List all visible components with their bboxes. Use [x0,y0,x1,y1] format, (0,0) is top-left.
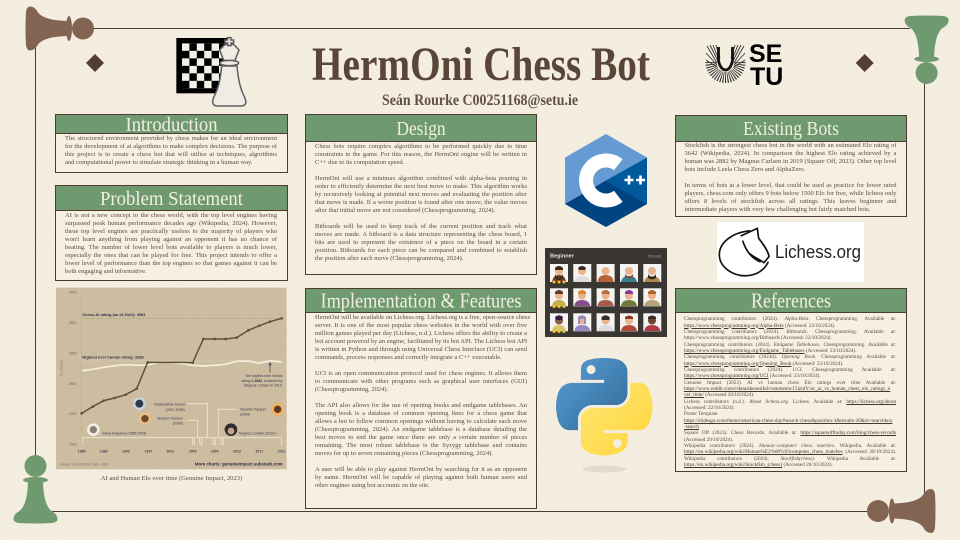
text: introduction body: this project is to create a chess bot that will utilise ai techniques, algorithms [65,151,277,158]
text: reference list: Chessprogramming contributors (2024d). Opening Book. Chessprogramming Available at: [684,354,896,360]
text: design body: constraints in the game. For this reason, the HermOni engine will be written in [315,151,527,158]
text: implementation body: bot account powered by an engine, facilitated by its bot API. The Lichess bot API [315,338,527,345]
chart: AI and human Elo over time: Source: Our World in Data, FIDE [60,463,109,467]
heading: introduction [56,115,287,134]
text: implementation body: (Chessprogramming, 2024). An endgame tablebase is a database detailing the [315,426,527,433]
text: reference list: Square Off (2023). Chess Records. Available at: https://squareofftoday.com/blog/chess-records [684,430,896,436]
text: reference list: https://www.chessprogramming.org/Opening_Book (Accessed: 23/10/2024). [684,361,843,367]
text: design body: position. Bitboards for each piece can be compared and combined to establish [315,247,527,254]
text: implementation body: UCI is an open communication protocol used for chess engines. It allows them [315,370,527,377]
icon: SETU logo: TU [750,63,783,91]
chart: AI and human Elo over time: 2021 [278,450,286,454]
heading: references [676,289,906,313]
text: problem statement body: especially the ones that can be played for free. This project intends to offer a [65,252,277,259]
text: reference list: https://www.chessprogramming.org/Bitboards (Accessed: 22/10/2024). [684,335,832,341]
text: reference list: https://www.chessprogramming.org/Endgame_Tablebases (Accessed: 23/10/2024). [684,348,857,354]
text: existing bots body: offers 8 levels of stockfish across all ratings. This leaves beginner and [684,198,896,205]
chart: AI and human Elo over time: 2001 [166,450,174,454]
icon: diamond left [86,54,104,72]
text: reference list: Wikipedia contributors (2024). Stockfish(chess). Wikipedia Available at: [684,456,896,462]
text: implementation body: is written in Python and through using Universal Chess Interface (UCI) can send [315,346,527,353]
text: introduction body [65,135,277,166]
icon: C++ logo [565,134,647,227]
text: existing bots body: Stockfish is the strongest chess bot in the world with an estimated Elo rating of [684,142,896,149]
text: implementation body: allows a bot to follow common openings without having to calculate each move [315,418,527,425]
text: design body: Bitboards will be used to keep track of the current position and track what [315,223,527,230]
heading: existing bots [676,116,906,142]
chart: AI and human Elo over time: 1989 [100,450,108,454]
text: reference list: (Accessed 20/10/2024). [684,437,733,443]
text: reference list: Wikipedia contributors (2024). Human–computer chess matches. Wikipedia. Available at: [684,443,896,449]
icon: SETU logo [706,40,783,91]
beginner bots screenshot [545,248,667,337]
text: design body [315,143,527,262]
chart: AI and human Elo over time: 1997 [144,450,152,454]
author line: Seán Rourke C00251168@setu.ie [382,92,578,109]
icon: SETU logo: SE [749,40,782,68]
chart: AI and human Elo over time: Chess AI rating (as of 2021): 3581 [82,312,147,317]
icon: brown pawn top left [26,6,94,50]
icon: green pawn top right [905,16,949,84]
text: implementation body: remaining. The most robust tablebase is the Syzygy tablebase and contains [315,442,527,449]
chart: AI and human Elo over time: Highest ever human rating: 2882 [82,354,145,359]
text: problem statement body: beating. The number of lower level bots available to players is much lower, [65,244,277,251]
text: implementation body: commands, process responses and correctly integrate a C++ executable. [315,354,502,361]
text: existing bots body: bots include Leela Chess Zero and AlphaZero. [684,166,805,173]
text: implementation body: moves for up to seven remaining pieces (Chessprogramming, 2024). [315,450,493,457]
text: reference list: Chessprogramming contributors (2024). Alpha-Beta. Chessprogramming. Available at: [684,316,896,322]
chart: AI and human Elo over time: 4000 [69,291,77,295]
text: problem statement body: lower level of performance than the top engines so that games against it can be [65,260,277,267]
chart: AI and human Elo over time: 2009 [211,450,219,454]
text: problem statement body [65,212,277,275]
chart: AI and human Elo over time: Magnus Carlsen (2010-) [239,431,277,435]
text: reference list: https://en.wikipedia.org/wiki/Stockfish_(chess) (Accessed 20/10/2024). [684,462,833,468]
heading: problem statement [56,186,287,211]
heading: design: Design [396,118,446,140]
chart: AI and human Elo over time [56,288,287,469]
text: design body: order to efficiently determine the next best move to make. This algorithm works [315,183,527,190]
icon: Python logo shadow [582,466,626,472]
beginner bots screenshot: 15 bots [648,254,661,258]
panel: design [305,114,537,275]
text: implementation body: The API also allows for the use of opening books and endgame tablebases. An [315,402,527,409]
text: design body: by recursively looking at potential next moves and evaluating the position after [315,191,527,198]
text: problem statement body: both engaging and informative. [65,268,147,275]
chart: AI and human Elo over time: (2009) [240,413,250,417]
icon: chess board and king logo [176,38,246,106]
chart: AI and human Elo over time: (2006) [173,422,183,426]
text: design body: Chess bots require complex algorithms to be performed quickly due to time [315,143,527,150]
chart: AI and human Elo over time: Elo Rating [59,360,63,376]
text: reference list: https://www.reddit.com/r/dataisbeautiful/comments/15lznlY/oc_ai_vs_human_chess_elo_ratings_o [684,386,890,392]
chart caption: AI and Human Elo over time (Genuine Impact, 2023) [101,475,242,482]
text: reference list: https://www.chessprogramming.org/UCI (Accessed: 23/10/2024). [684,373,821,379]
text: reference list: -search [684,424,699,430]
icon: Python logo [556,358,652,456]
chart: AI and human Elo over time: Vesselin Topalov [157,417,183,421]
text: implementation body: best moves to end the game once there are only a certain number of pieces [315,434,527,441]
text: problem statement body: these top level engines are practically useless to the majority of players who [65,228,277,235]
text: implementation body: opening book is a database of common opening lines for a chess game that [315,410,527,417]
text: existing bots body: In terms of bots at a lower level, that could be used as practice for lower rated [684,182,896,189]
chart: AI and human Elo over time: (2007-2008) [166,408,185,412]
chart: AI and human Elo over time: 3500 [69,321,77,325]
text: reference list: Chessprogramming contributors (2024). Endgame Tablebases. Chessprogramming. Available at: [684,342,896,348]
text: reference list: Lichess contributors (n.d.). About lichess.org. Lichess. Available at: https://lichess.org/about [684,399,896,405]
text: design body: that move is made. If a worse position is found after one move, the value moves [315,199,527,206]
text: reference list: Chessprogramming contributors (2024). Bitboards. Chessprogramming. Available at: [684,329,896,335]
text: implementation body: A user will be able to play against HermOni by searching for it as an opponent [315,466,527,473]
chart: AI and human Elo over time: More charts: genuineimpact.substack.com [195,461,283,466]
text: implementation body: HermOni will be available on Lichess.org. Lichess.org is a free, open-source chess [315,314,530,321]
chart: AI and human Elo over time: rating is 2882, achieved by [241,379,283,383]
icon: diamond right [856,54,874,72]
text: reference list [684,316,896,468]
heading: problem statement: Problem Statement [100,188,243,210]
text: implementation body: other engines using bot accounts on the site. [315,482,430,489]
text: existing bots body: intermediate players with very few challenging but fairly matched bots. [684,206,870,213]
text: implementation body: by name. HermOni will be capable of playing against both human users and [315,474,527,481]
chart: AI and human Elo over time: 2500 [69,382,77,386]
text: existing bots body: human was 2882 by Magnus Carlsen in 2019 (Square Off, 2023). Other top level [684,158,896,165]
text: reference list: Genuine Impact (2023). AI vs human chess Elo ratings over time Available at: [684,380,896,386]
chart: AI and human Elo over time: Viswanathan Anand [154,403,185,407]
chart: AI and human Elo over time: 2013 [233,450,241,454]
title: HermOni Chess Bot [312,38,650,91]
panel: problem statement [55,185,288,281]
text: design body: moves are made. A bitboard is a data structure representing the chess board, 1 [315,231,527,238]
chart: AI and human Elo over time: The highest ever human [245,374,283,378]
chart: AI and human Elo over time: 1985 [78,450,86,454]
text: introduction body: and computational power to simulate strategic thinking in a human way. [65,159,252,166]
heading: design [306,115,536,142]
text: introduction body: The structured environment provided by chess makes for an ideal environment [65,135,277,142]
text: design body: the position after each move (Chessprogramming, 2024). [315,255,463,262]
icon: green pawn bottom left [14,455,58,524]
chart: AI and human Elo over time: Magnus Carlsen in 2019. [244,384,283,388]
text: reference list: https://www.chessprogramming.org/Alpha-Beta (Accessed: 22/10/2024). [684,323,836,329]
beginner bots screenshot: Beginner [550,254,575,260]
heading: existing bots: Existing Bots [743,118,839,140]
chart: AI and human Elo over time: 2000 [69,412,77,416]
text: reference list: (Accessed: 22/10/2024). [684,405,735,411]
text: reference list: https://en.wikipedia.org/wiki/Human%E2%80%93computer_chess_matches (Accessed 20/10/2024). [684,449,896,455]
text: existing bots body: players, chess.com only offers 9 bots below 1500 Elo for free, while lichess only [684,190,896,197]
text: implementation body [315,314,530,489]
text: design body: HermOni will use a minimax algorithm combined with alpha-beta pruning in [315,175,527,182]
chart: AI and human Elo over time: 3000 [69,352,77,356]
Lichess logo [717,222,864,282]
icon: brown pawn bottom right [867,489,936,533]
chart: AI and human Elo over time: 2005 [189,450,197,454]
panel: introduction [55,114,288,173]
chart: AI and human Elo over time: Vesselin Topalov [240,408,266,412]
text: existing bots body [684,142,896,213]
text: implementation body: (Chessprogramming, 2024). [315,386,388,393]
text: implementation body: server. It is one of the most popular chess websites in the world with over five [315,322,527,329]
text: design body: bits are used to represent the existence of a piece on the board in a certain [315,239,527,246]
chart: AI and human Elo over time: 2017 [255,450,263,454]
text: implementation body: million games played per day (Lichess, n.d.). Lichess offers the ability to create a [315,330,527,337]
text: reference list: Chessprogramming contributors (2024). UCI. Chessprogramming Available at: [684,367,896,373]
Lichess logo: Lichess.org [775,241,861,262]
text: reference list: ver_time/ (Accessed 20/10/2024). [684,392,754,398]
text: problem statement body: won't learn anything from playing against an opponent it has no chance of [65,236,277,243]
text: introduction body: for the development of ai algorithms to make complex decisions. The purpose of [65,143,277,150]
panel: existing bots [675,115,907,217]
text: design body: after that initial move are not considered (Chessprogramming, 2024). [315,207,495,214]
text: problem statement body: surpassed peak human performance decades ago (Wikipedia, 2024). However, [65,220,277,227]
panel: implementation and features [305,288,537,509]
chart: AI and human Elo over time: Garry Kasparov (1985-2005) [102,431,146,435]
chart: AI and human Elo over time: 1500 [69,443,77,447]
text: reference list: https://slidesgo.com/theme/american-chess-day#search-chess&position-3&results-36&rs=searchbox [684,418,892,424]
text: problem statement body: AI is not a new concept to the chess world, with the top level engines having [65,212,277,219]
text: implementation body: to communicate with other programs such as graphical user interfaces (GUI) [315,378,527,385]
text: reference list: Poster Template [684,411,717,417]
panel: references [675,288,907,472]
text: design body: C++ due to its computation speed. [315,159,404,166]
chart: AI and human Elo over time: 1993 [122,450,130,454]
text: existing bots body: 3642 (Wikipedia, 2024). In comparison the highest Elo rating achieved by a [684,150,896,157]
